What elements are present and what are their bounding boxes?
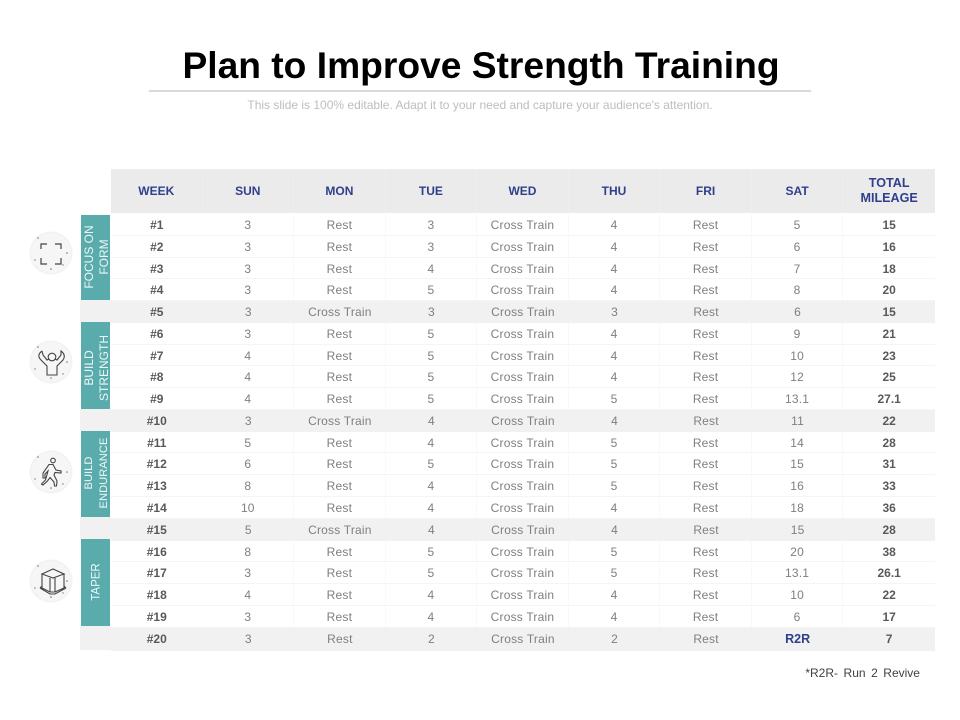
table body: 20 [882,283,896,297]
table body: #10 [147,414,167,428]
table body: Cross Train [308,414,372,428]
subtitle: This slide is 100% editable. Adapt it to your need and capture your audience's attention. [247,98,713,112]
table body: 5 [427,370,434,384]
table body: Rest [327,349,352,363]
table body: Rest [693,588,718,602]
table body: 3 [244,327,251,341]
table body: 21 [882,327,896,341]
table body: 15 [882,305,896,319]
table body: #4 [150,283,163,297]
table header: MON [325,184,353,198]
table body: 4 [427,436,434,450]
table body: Rest [327,566,352,580]
table body: #15 [147,523,167,537]
table body: #11 [147,436,166,450]
label: build strength: BUILD [82,350,96,385]
table body: 28 [882,523,896,537]
table body: 9 [794,327,801,341]
table body: 5 [427,457,434,471]
label: build endurance: ENDURANCE [98,437,110,508]
table body: 16 [790,479,804,493]
table body: 5 [427,392,434,406]
table body: 3 [244,283,251,297]
table body: 4 [244,588,251,602]
table body: Cross Train [491,566,554,580]
table header: SAT [786,184,809,198]
table body: 10 [241,501,255,515]
table body: Cross Train [491,218,554,232]
table body: 5 [794,218,801,232]
table body: Cross Train [491,283,554,297]
table body: 4 [611,414,618,428]
table body: 10 [790,349,804,363]
table body: #19 [147,610,167,624]
table body: 4 [611,262,617,276]
table body: 5 [611,479,617,493]
table body: Rest [693,610,718,624]
table body: 20 [790,545,804,559]
table body: 2 [428,632,435,646]
label: focus on form [81,215,110,300]
table body: Rest [327,457,352,471]
table body: 5 [427,327,434,341]
table body: Cross Train [491,501,554,515]
table body: Rest [327,501,352,515]
table body: Rest [693,349,718,363]
table body: 31 [882,457,896,471]
table body: 18 [790,501,804,515]
table body: 5 [427,283,434,297]
table body: Cross Train [491,327,554,341]
title: Plan to Improve Strength Training [182,44,780,86]
table header: TUE [419,184,443,198]
label: build strength [81,322,110,409]
table body: 12 [790,370,804,384]
label: build endurance [81,431,110,517]
table body: #20 [147,632,167,646]
table body: #7 [150,349,163,363]
table body: Rest [327,392,352,406]
table body: 38 [882,545,896,559]
table body: 4 [611,370,617,384]
table header: WED [508,184,536,198]
table body: Cross Train [491,262,554,276]
table body: Rest [327,545,352,559]
table body: 5 [611,566,617,580]
table body: 3 [244,566,251,580]
table body: #12 [147,457,167,471]
table body: Rest [327,240,352,254]
table body: 16 [882,240,896,254]
table body: Cross Train [491,523,555,537]
table body: R2R [785,632,810,646]
table body: 8 [244,479,251,493]
label: taper: TAPER [90,563,102,600]
table body: 15 [791,523,804,537]
table body: 4 [611,501,617,515]
table body: 4 [427,610,434,624]
table body: 14 [790,436,804,450]
table body: 13.1 [785,392,809,406]
table body: 4 [611,240,617,254]
table body: #13 [147,479,167,493]
table body: 4 [611,349,617,363]
table body: 3 [427,240,434,254]
table body: Rest [327,479,352,493]
table body: 23 [882,349,896,363]
band shading: recovery rows left extension [80,300,111,322]
table body: 22 [882,414,896,428]
table body: 7 [794,262,801,276]
table body: Rest [693,457,718,471]
table body: 6 [794,610,801,624]
table body: #9 [150,392,163,406]
table header: FRI [696,184,715,198]
table body: Rest [693,479,718,493]
table body: Rest [693,327,718,341]
table body: #5 [150,305,163,319]
footnote: *R2R- Run 2 Revive [805,666,920,680]
table body: 5 [611,392,617,406]
table body: 5 [427,566,434,580]
table body: Rest [327,218,352,232]
table body: Cross Train [491,370,554,384]
table header: TOTAL [869,176,910,190]
table body: Rest [693,501,718,515]
table body: 5 [611,436,617,450]
table body: 3 [245,305,252,319]
label: focus on form: FORM [97,239,111,274]
table body: Cross Train [491,414,555,428]
table body: #3 [150,262,163,276]
label: taper [81,539,110,626]
table body: 3 [244,262,251,276]
table body: 11 [791,414,804,428]
table body: 4 [611,218,617,232]
icon: flexing person [30,340,72,384]
table body: #8 [150,370,163,384]
table body: 5 [427,545,434,559]
table body: Rest [693,283,718,297]
label: focus on form: FOCUS ON [82,225,96,288]
table body: Cross Train [308,523,372,537]
table header: THU [602,184,626,198]
table body: 7 [886,632,892,646]
table body: 4 [244,392,251,406]
table body: #18 [147,588,167,602]
table body: Rest [693,523,719,537]
table body: 10 [790,588,804,602]
table body: 36 [882,501,896,515]
table body: 3 [427,218,434,232]
table body: Rest [693,240,718,254]
table body: Cross Train [491,632,555,646]
table body: 3 [244,610,251,624]
table body: 26.1 [877,566,901,580]
table body: 3 [245,632,252,646]
table body: 4 [244,349,251,363]
table header: WEEK [138,184,174,198]
table body: 6 [794,240,801,254]
table body: Rest [693,566,718,580]
table body: Cross Train [491,610,554,624]
table body: 3 [244,218,251,232]
table body: Rest [693,414,719,428]
table body: Rest [327,370,352,384]
table body: Rest [327,436,352,450]
table body: Rest [327,632,353,646]
table body: Rest [327,283,352,297]
table body: Cross Train [491,349,554,363]
table body: Rest [693,436,718,450]
table body: Cross Train [491,436,554,450]
table body: Cross Train [491,392,554,406]
icon: focus frame [30,232,72,274]
table body: 5 [245,523,252,537]
table body: 8 [244,545,251,559]
table body: 4 [611,610,617,624]
table body: 18 [882,262,896,276]
table body: Rest [693,632,719,646]
table body: #6 [150,327,163,341]
table body: 4 [244,370,251,384]
table body: 4 [611,327,617,341]
table body: 6 [244,457,251,471]
table body: 33 [882,479,896,493]
table body: Cross Train [308,305,372,319]
table body: 17 [882,610,896,624]
table body: 2 [611,632,618,646]
table body: 4 [427,262,434,276]
table body: 5 [611,545,617,559]
table body: #2 [150,240,163,254]
table body: 4 [427,479,434,493]
table body: 25 [882,370,896,384]
table body: #17 [147,566,167,580]
table header: MILEAGE [860,191,918,205]
table body: 4 [611,523,618,537]
table body: 4 [427,588,434,602]
table body: Rest [693,262,718,276]
table body: 27.1 [877,392,901,406]
table body: 4 [611,283,617,297]
table body: #16 [147,545,167,559]
table body: Rest [693,218,718,232]
table body: Rest [693,545,718,559]
table body: 5 [244,436,251,450]
table body: 28 [882,436,896,450]
table body: Cross Train [491,305,555,319]
label: build strength: STRENGTH [97,334,111,400]
table body: Cross Train [491,457,554,471]
table body: Rest [693,305,719,319]
table body: 4 [427,501,434,515]
icon: walking person [30,450,72,494]
table body: 15 [882,218,896,232]
icon: box [30,560,72,602]
table body: 3 [244,240,251,254]
label: build endurance: BUILD [83,456,95,489]
table body: 5 [611,457,617,471]
table header: SUN [235,184,260,198]
table body: 3 [611,305,618,319]
table body: Cross Train [491,479,554,493]
table body: Rest [693,370,718,384]
table body: 8 [794,283,801,297]
table body: Rest [327,588,352,602]
table body: 3 [245,414,252,428]
table body: Rest [327,262,352,276]
table body: 4 [428,523,435,537]
table body: 5 [427,349,434,363]
table body: 6 [794,305,801,319]
table body: Cross Train [491,240,554,254]
table body: #1 [150,218,163,232]
table body: Rest [693,392,718,406]
table body: 15 [790,457,804,471]
table body: 3 [428,305,435,319]
table body: 13.1 [785,566,809,580]
table body: Rest [327,610,352,624]
table body: 22 [882,588,896,602]
table body: 4 [428,414,435,428]
table body: Rest [327,327,352,341]
table body: Cross Train [491,545,554,559]
table header [111,169,935,213]
table body: #14 [147,501,167,515]
table body: Cross Train [491,588,554,602]
table body: 4 [611,588,617,602]
